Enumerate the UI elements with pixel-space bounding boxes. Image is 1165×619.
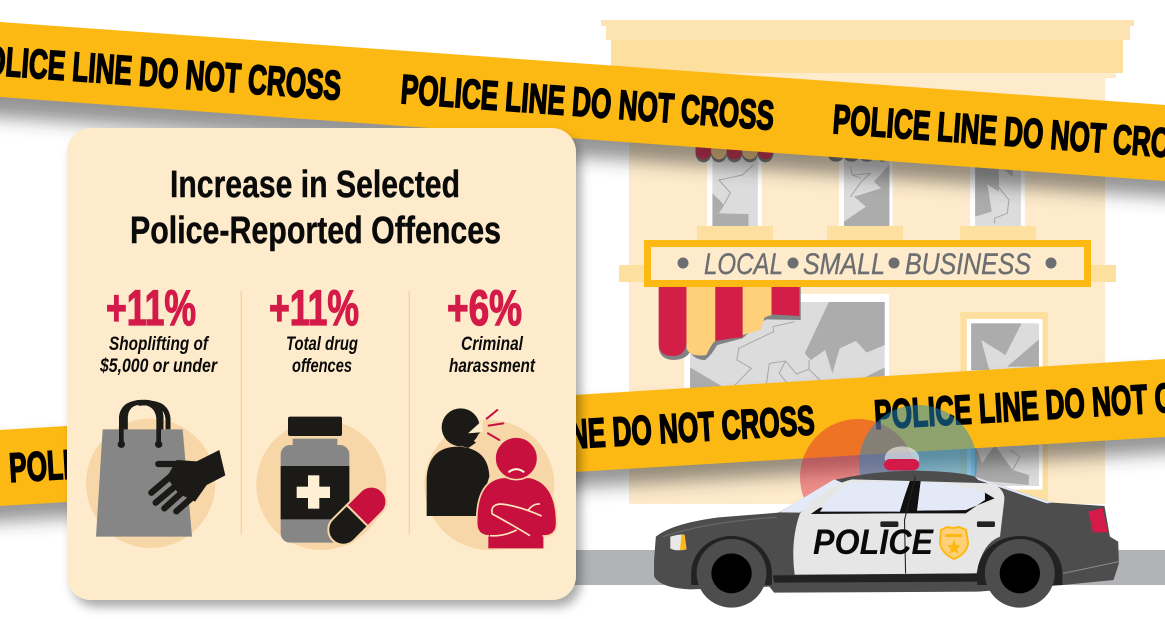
- sign: local small business: [648, 244, 1088, 284]
- stat: total drug offences: +11%: [269, 280, 359, 336]
- lower police tape: [0, 359, 1165, 506]
- sign: local small business: LOCAL: [704, 248, 783, 281]
- icon: police badge: [940, 527, 968, 559]
- stat: criminal harassment: [447, 280, 536, 377]
- lower police tape: POLICE LINE DO NOT CROSS: [440, 397, 816, 465]
- icon: person yelling at upset person: [424, 408, 557, 550]
- sign: local small business: BUSINESS: [905, 248, 1031, 281]
- stat: shoplifting: +11%: [106, 280, 196, 336]
- small awning scallops: [695, 140, 888, 162]
- police car: [654, 446, 1119, 608]
- upper floor windows: [695, 140, 1025, 228]
- sign: local small business: SMALL: [803, 248, 885, 281]
- tape shadows: [0, 40, 1165, 523]
- lower windows: [684, 294, 1048, 502]
- police siren light beams: [800, 405, 977, 535]
- stat: criminal harassment: Criminal: [461, 334, 524, 355]
- heading: [130, 164, 501, 252]
- stat: criminal harassment: +6%: [447, 280, 522, 336]
- stat: shoplifting: [99, 280, 218, 377]
- stat: shoplifting: $5,000 or under: [99, 356, 218, 377]
- stat: criminal harassment: harassment: [449, 356, 536, 377]
- icon: pill bottle and capsule: [256, 417, 393, 551]
- stat: shoplifting: Shoplifting of: [109, 334, 209, 355]
- road: [560, 550, 1165, 585]
- heading: Increase in Selected: [170, 164, 460, 206]
- top police tape: [0, 22, 1165, 181]
- panel: increase in selected offences: [67, 128, 576, 600]
- building: [601, 20, 1134, 504]
- ledge: [619, 265, 1116, 282]
- stat: total drug offences: [269, 280, 359, 377]
- stat: total drug offences: offences: [292, 356, 352, 377]
- stat: total drug offences: Total drug: [286, 334, 358, 355]
- icon: shopping bag and hand: [86, 402, 225, 548]
- striped awning: [659, 280, 801, 360]
- top police tape: POLICE LINE DO NOT CROSS: [399, 66, 776, 139]
- window sills: [697, 226, 1036, 242]
- lower police tape: POLICE LINE DO NOT CROSS: [8, 423, 384, 491]
- car lettering: POLICE: [813, 523, 935, 562]
- heading: Police-Reported Offences: [130, 210, 501, 252]
